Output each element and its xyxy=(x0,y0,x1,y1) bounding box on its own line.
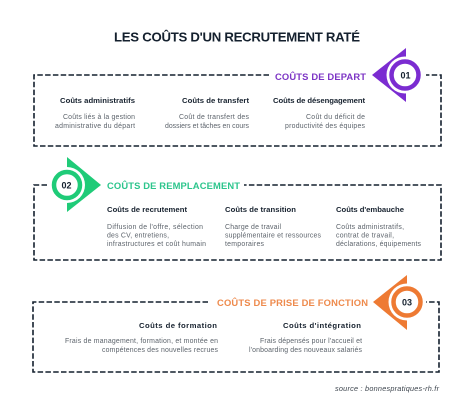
heading: coûts de remplacement: COÛTS DE REMPLACEMENT xyxy=(107,180,240,191)
column: coûts de transition: supplémentaire et ressources xyxy=(225,232,322,240)
icon: purple arrow badge 01: 01 xyxy=(400,70,411,80)
column: coûts d'embauche xyxy=(336,205,422,248)
column: coûts de formation: Coûts de formation xyxy=(139,321,217,330)
column: coûts administratifs: administrative du départ xyxy=(55,123,135,130)
column: coûts de désengagement: Coût du déficit de xyxy=(306,114,365,121)
column: coûts de désengagement xyxy=(273,96,366,130)
panel: coûts de prise de fonction xyxy=(33,275,439,372)
icon: green arrow badge 02 xyxy=(49,157,101,212)
column: coûts de transfert: Coûts de transfert xyxy=(182,96,249,105)
icon: green arrow badge 02: 02 xyxy=(61,180,72,190)
column: coûts de transfert xyxy=(165,96,250,130)
column: coûts de recrutement: infrastructures et coût humain xyxy=(107,241,206,248)
column: coûts administratifs xyxy=(55,96,135,130)
column: coûts de recrutement: Diffusion de l'offre, sélection xyxy=(107,224,203,231)
column: coûts de recrutement: des CV, entretiens, xyxy=(107,232,169,240)
dashed frame 3 xyxy=(33,302,439,372)
column: coûts d'intégration xyxy=(249,321,363,354)
icon: purple arrow badge 01 xyxy=(372,48,424,102)
column: coûts de transfert: dossiers et tâches en cours xyxy=(165,123,250,130)
icon: orange arrow badge 03 xyxy=(373,275,426,330)
heading: coûts de prise de fonction: COÛTS DE PRISE DE FONCTION xyxy=(217,297,368,308)
column: coûts d'embauche: contrat de travail, xyxy=(336,232,394,240)
column: coûts d'embauche: déclarations, équipements xyxy=(336,241,422,248)
column: coûts de transition xyxy=(225,205,322,248)
panel: coûts de départ xyxy=(34,48,441,146)
dashed frame 2 xyxy=(34,185,441,260)
column: coûts d'embauche: Coûts d'embauche xyxy=(336,205,405,214)
column: coûts administratifs: Coûts liés à la gestion xyxy=(63,114,135,121)
column: coûts de transfert: Coût de transfert des xyxy=(179,114,250,121)
source note: source : bonnespratiques-rh.fr xyxy=(335,384,440,393)
column: coûts administratifs: Coûts administratifs xyxy=(60,96,135,105)
heading: coûts de départ: COÛTS DE DEPART xyxy=(275,71,366,82)
column: coûts de désengagement: Coûts de désengagement xyxy=(273,96,365,105)
icon: orange arrow badge 03: 03 xyxy=(402,298,412,308)
column: coûts de formation: Frais de management, formation, et montée en xyxy=(65,338,218,345)
column: coûts de recrutement: Coûts de recrutement xyxy=(107,205,187,214)
title: LES COÛTS D'UN RECRUTEMENT RATÉ xyxy=(114,30,360,44)
column: coûts d'embauche: Coûts administratifs, xyxy=(336,224,404,231)
column: coûts de transition: temporaires xyxy=(225,241,265,248)
column: coûts d'intégration: Coûts d'intégration xyxy=(283,321,361,330)
column: coûts d'intégration: Frais dépensés pour l'accueil et xyxy=(260,338,362,345)
column: coûts de recrutement xyxy=(107,205,206,248)
panel: coûts de remplacement xyxy=(34,157,441,260)
column: coûts de transition: Charge de travail xyxy=(225,224,281,231)
column: coûts d'intégration: l'onboarding des nouveaux salariés xyxy=(249,347,363,354)
column: coûts de formation xyxy=(65,321,219,354)
column: coûts de formation: compétences des nouvelles recrues xyxy=(102,347,219,354)
column: coûts de désengagement: productivité des équipes xyxy=(285,123,366,130)
dashed frame 1 xyxy=(34,75,441,146)
column: coûts de transition: Coûts de transition xyxy=(225,205,296,214)
